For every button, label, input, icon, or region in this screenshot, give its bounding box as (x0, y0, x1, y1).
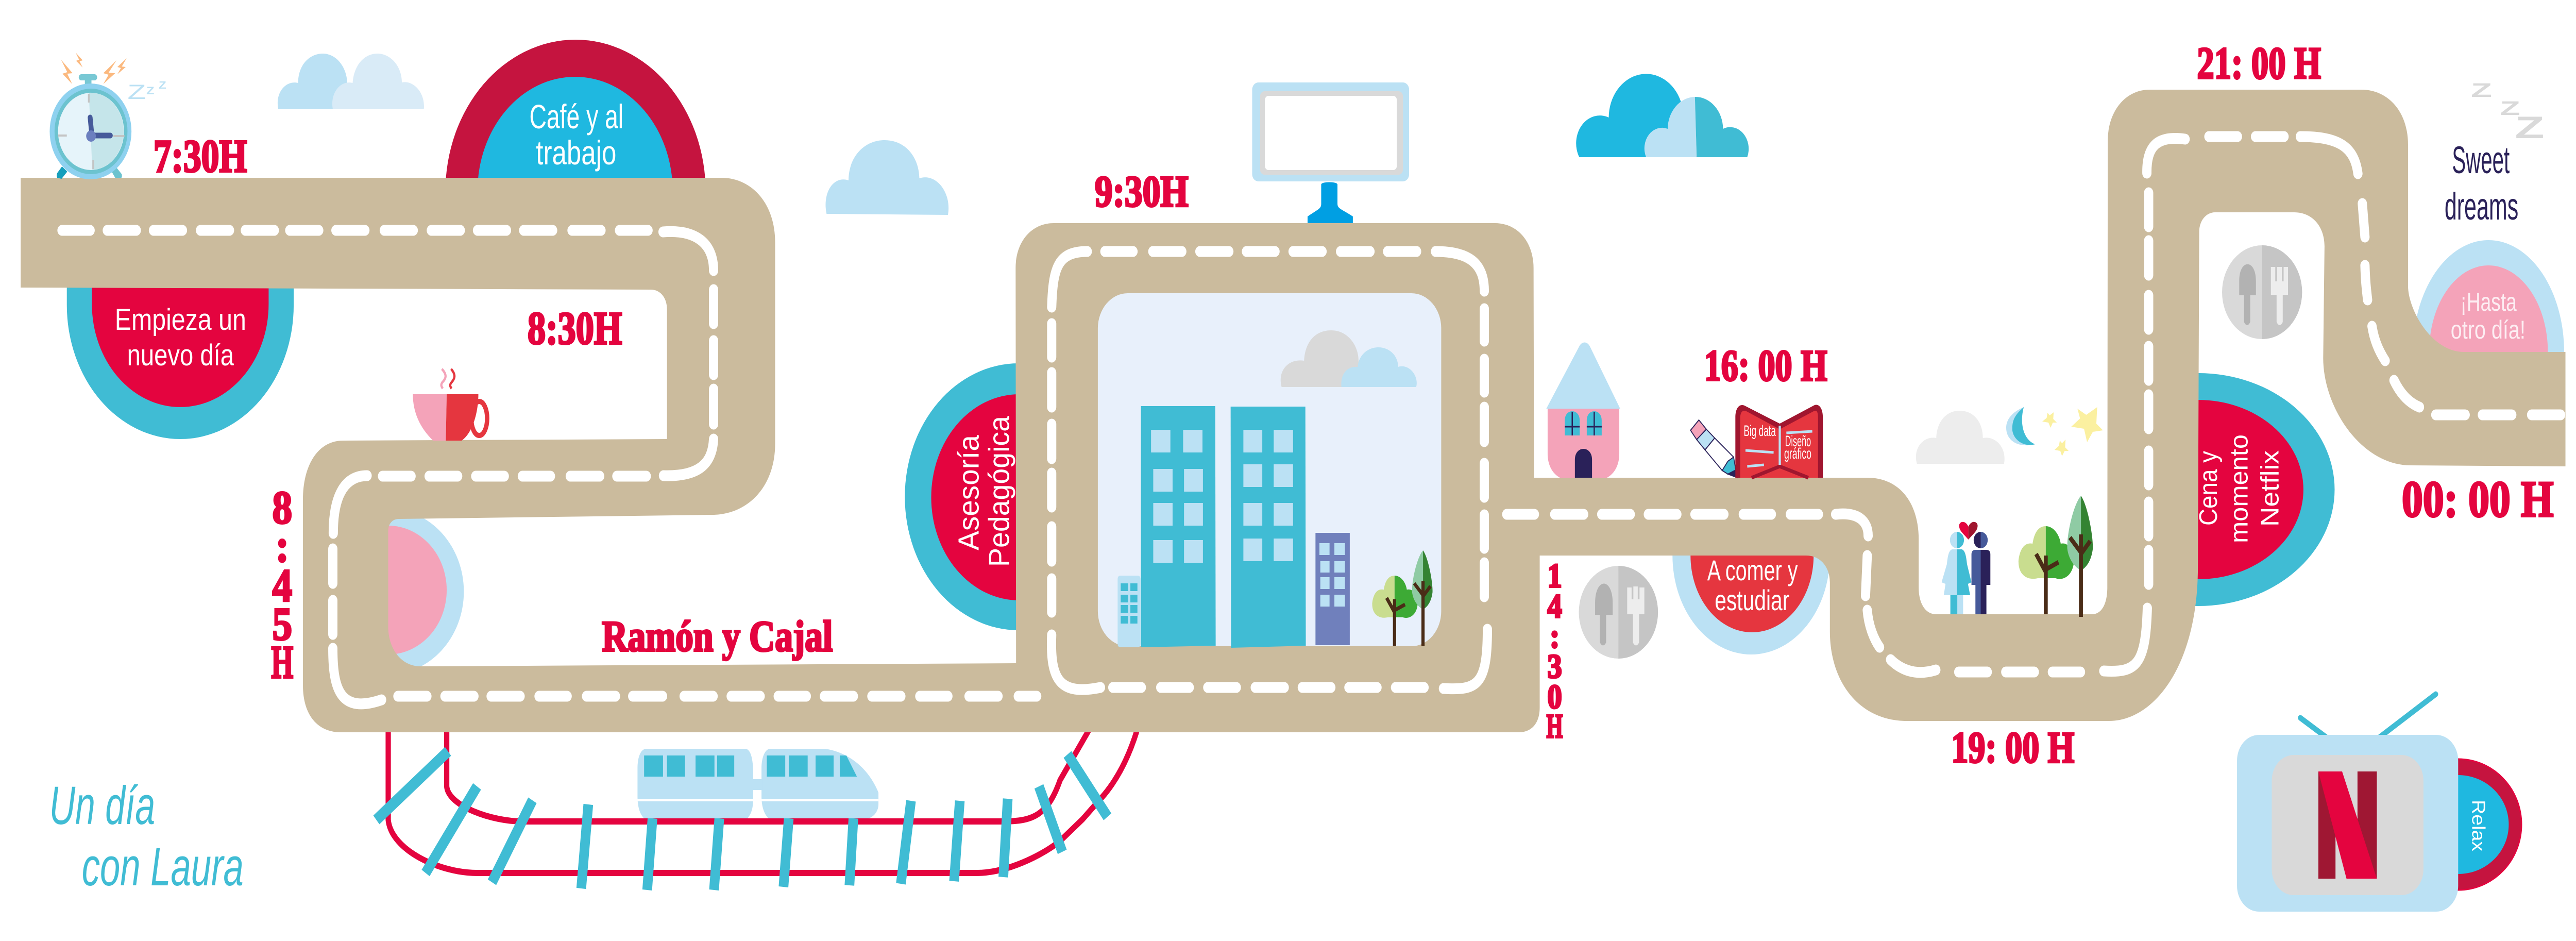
time: 14:30H vertical: H (1547, 708, 1563, 745)
icon: clock zzz (127, 79, 166, 104)
icon: moon (2006, 407, 2035, 445)
label: Cena y momento Netflix: Netflix (2256, 450, 2284, 527)
monitor (1252, 82, 1409, 181)
circle: Cena y momento Netflix (2176, 373, 2334, 606)
label: Café y al trabajo (529, 98, 623, 172)
time: 7:30H: 7:30H (154, 130, 247, 182)
icon: tree round (2019, 526, 2074, 614)
circle: Empieza un nuevo día (67, 258, 294, 439)
icon: house (1546, 342, 1620, 478)
label: Cena y momento Netflix: momento (2225, 434, 2253, 543)
label: Sweet dreams: dreams (2445, 185, 2518, 228)
book labels: Diseño (1785, 432, 1811, 449)
time: 16:00 H: 16: 00 H (1704, 342, 1827, 390)
label: Asesoría Pedagógica (953, 415, 1015, 567)
time: 00:00 H: 00: 00 H (2402, 471, 2553, 528)
label: A comer y estudiar: A comer y (1707, 555, 1798, 587)
label: Cena y momento Netflix (2194, 434, 2284, 543)
panel background (1098, 293, 1441, 646)
icon: coffee cup (413, 369, 487, 441)
time: 14:30H vertical: 3 (1548, 648, 1562, 685)
icon: TV Netflix (2237, 694, 2458, 912)
label: Empieza un nuevo día: Empieza un (115, 303, 246, 337)
time: 8:45H vertical: : (276, 520, 289, 572)
city panel (1098, 293, 1441, 648)
icon: tree tall (2067, 496, 2093, 617)
building 1 (1141, 406, 1216, 647)
icon: pencil (1690, 420, 1738, 478)
cloud: blue (1576, 74, 1749, 157)
label: Sweet dreams (2445, 139, 2518, 228)
circle: Hasta otro día (2413, 240, 2564, 464)
cloud: top left (278, 54, 424, 109)
train tracks (377, 721, 1140, 890)
label: Sweet dreams: Sweet (2452, 139, 2510, 181)
building 2 (1231, 407, 1306, 648)
time: 8:45H vertical: 4 (273, 560, 292, 611)
time: 19:00 H: 19: 00 H (1951, 724, 2074, 772)
circle: Café y al trabajo (445, 40, 706, 192)
time: 8:30H: 8:30H (528, 303, 622, 354)
label: Asesoría Pedagógica: Pedagógica (983, 415, 1015, 567)
label: Café y al trabajo: Café y al (529, 98, 623, 136)
icon: book (1735, 405, 1823, 478)
icon: clock zzz: Z (127, 80, 146, 104)
time: 9:30H: 9:30H (1095, 167, 1189, 216)
time: 8:45H vertical: 5 (273, 598, 292, 650)
time: 8:45H vertical: 8 (273, 482, 292, 533)
street name: Ramón y Cajal: Ramón y Cajal (602, 613, 833, 661)
icon: plate lunch (1579, 566, 1658, 659)
label: Empieza un nuevo día: nuevo día (127, 339, 234, 372)
label: Hasta otro día (2451, 288, 2526, 344)
icon: clock zzz: Z (146, 85, 155, 97)
label: Empieza un nuevo día (115, 303, 246, 372)
icon: alarm clock (49, 53, 131, 179)
label: Asesoría Pedagógica: Asesoría (953, 434, 985, 550)
label: Relax: Relax (2468, 800, 2488, 851)
building 4 (1117, 576, 1141, 647)
time: 14:30H vertical: 1 (1548, 557, 1562, 595)
time: 8:45H vertical: H (272, 636, 293, 688)
panel tree round (1372, 576, 1418, 646)
icon: sleep zzz: Z (2471, 80, 2492, 102)
title: Un día con Laura (49, 775, 244, 897)
icon: alarm bolts (61, 53, 127, 84)
road (21, 90, 2566, 732)
label: A comer y estudiar: estudiar (1715, 585, 1789, 617)
title: Un día con Laura: Un día (49, 775, 155, 836)
circle: Asesoría Pedagógica (905, 363, 1132, 630)
circle: Relax (2395, 759, 2521, 890)
icon: couple (1942, 522, 1990, 614)
icon: clock zzz: Z (159, 79, 166, 91)
cloud: middle (825, 140, 948, 215)
monitor stand (1308, 182, 1353, 223)
title: Un día con Laura: con Laura (82, 836, 244, 897)
panel tree tall (1412, 550, 1433, 646)
icon: sleep zzz: Z (2500, 98, 2520, 120)
cloud: night (1916, 411, 2005, 464)
panel clouds (1281, 330, 1417, 387)
road centre dashes (62, 137, 2561, 704)
icon: sleep zzz: Z (2515, 110, 2545, 145)
label: A comer y estudiar (1707, 555, 1798, 617)
icon: plate dinner (2222, 245, 2302, 339)
book labels (1744, 422, 1811, 462)
label: Café y al trabajo: trabajo (536, 134, 616, 172)
time: 14:30H vertical: 0 (1548, 678, 1562, 716)
book labels: gráfico (1784, 445, 1811, 462)
train (637, 749, 878, 818)
icon: stars (2042, 407, 2103, 456)
building 3 (1315, 533, 1350, 645)
label: Hasta otro día: otro día! (2451, 315, 2526, 344)
time: 14:30H vertical (1547, 557, 1563, 745)
circle: parada 8:45 (313, 509, 464, 675)
label: Hasta otro día: ¡Hasta (2461, 288, 2517, 316)
time: 8:45H vertical (272, 482, 293, 688)
time: 14:30H vertical: : (1550, 617, 1560, 655)
time: 21:00 H: 21: 00 H (2197, 38, 2321, 88)
icon: sleep zzz (2471, 80, 2545, 145)
time: 14:30H vertical: 4 (1548, 587, 1562, 625)
circle: A comer y estudiar (1672, 515, 1830, 654)
label: Cena y momento Netflix: Cena y (2194, 451, 2223, 526)
book labels: Big data (1744, 422, 1776, 439)
